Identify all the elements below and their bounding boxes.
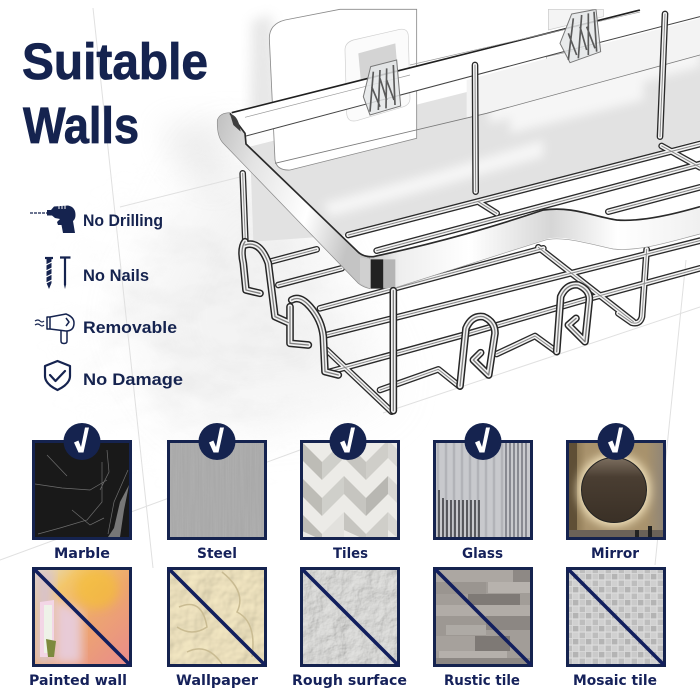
- icon: shield with check: [45, 361, 70, 390]
- icon: drill: [30, 205, 76, 233]
- title: Suitable: [22, 33, 208, 90]
- label: no damage: No Damage: [83, 370, 183, 389]
- title: Walls: [23, 97, 139, 154]
- feature: no drilling: [30, 205, 163, 233]
- check badge: glass: [464, 423, 502, 460]
- swatch: mirror: [566, 440, 666, 540]
- far adhesive plate right: [547, 9, 603, 70]
- label: removable: Removable: [83, 318, 177, 337]
- label: painted wall: Painted wall: [29, 673, 127, 689]
- label: wallpaper: Wallpaper: [176, 673, 258, 689]
- shower basket product illustration: [217, 0, 700, 412]
- title: [22, 33, 208, 154]
- feature: no nails: [45, 257, 149, 289]
- swatch: painted wall: [32, 567, 132, 667]
- back rail band: [232, 0, 700, 163]
- swatch: glass: [433, 440, 533, 540]
- swatch: steel: [167, 440, 267, 540]
- label: tiles: Tiles: [333, 546, 368, 562]
- swatch: rustic tile: [433, 567, 533, 667]
- label: no drilling: No Drilling: [83, 211, 163, 230]
- swatch: marble: [32, 440, 132, 540]
- basket top frame: [217, 113, 700, 289]
- small adhesive hook pad left: [345, 29, 410, 121]
- label: mirror: Mirror: [591, 546, 639, 562]
- rear and floor wires: [243, 14, 700, 412]
- front wires and hooks: [242, 242, 589, 411]
- check badge: tiles: [330, 423, 366, 460]
- swatch: tiles: [300, 440, 400, 540]
- swatch: wallpaper: [167, 567, 267, 667]
- label: glass: Glass: [462, 546, 503, 562]
- label: rough surface: Rough surface: [292, 673, 407, 689]
- icon: hair dryer: [35, 314, 74, 344]
- feature: no damage: [45, 361, 183, 390]
- label: marble: Marble: [54, 546, 110, 562]
- label: no nails: No Nails: [83, 266, 149, 285]
- check badge: mirror: [598, 423, 634, 460]
- soft marble highlights behind basket: [323, 43, 700, 217]
- background: marble wall: [0, 8, 700, 568]
- transparent hook clip right: [560, 9, 601, 63]
- label: mosaic tile: Mosaic tile: [573, 673, 657, 689]
- swatch: rough surface: [300, 567, 400, 667]
- icon: screw and nail: [45, 257, 70, 289]
- check badge: steel: [198, 423, 236, 460]
- check badge: marble: [64, 423, 100, 460]
- label: steel: Steel: [197, 546, 237, 562]
- feature: removable: [35, 314, 177, 344]
- wall visible behind basket: [250, 33, 700, 242]
- transparent hook clip left: [363, 60, 401, 115]
- large adhesive wall plate: [269, 9, 417, 170]
- label: rustic tile: Rustic tile: [444, 673, 520, 689]
- swatch: mosaic tile: [566, 567, 666, 667]
